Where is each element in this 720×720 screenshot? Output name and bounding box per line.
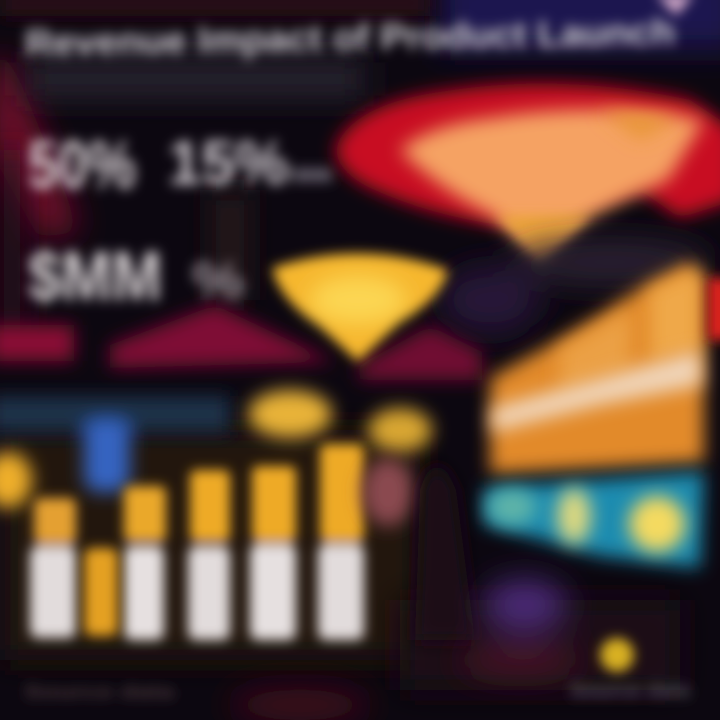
footer text: Source data — [570, 680, 691, 702]
figure: pink glow and silhouette — [362, 458, 475, 640]
footer text — [24, 680, 691, 702]
chart: perspective orange bars — [490, 262, 720, 474]
stat text: first row: 50% — [28, 127, 136, 203]
stat text: second row: % — [192, 252, 244, 310]
column four — [250, 466, 296, 640]
stat text: first row — [28, 127, 332, 203]
band: blue strip — [0, 396, 230, 492]
stat text: first row: 15% — [168, 129, 288, 198]
small orange bar — [84, 548, 118, 636]
icon: top corner mark — [656, 0, 694, 16]
footer text: Source data — [24, 682, 175, 702]
column one — [30, 498, 76, 638]
column five — [318, 444, 364, 640]
title: Revenue Impact of Product Launch — [25, 11, 675, 64]
stat text: second row: $MM — [28, 237, 162, 315]
column three — [188, 470, 230, 640]
icon: yellow dot — [600, 638, 634, 672]
icon: small yellow shapes — [0, 390, 432, 508]
column two — [124, 486, 166, 640]
purple and maroon glows — [230, 579, 580, 720]
band: maroon roof — [0, 305, 482, 380]
dark clouds — [440, 240, 710, 334]
chart: yellow funnel — [272, 253, 448, 362]
panel: teal stat boxes — [484, 472, 704, 568]
chart: large red and orange funnel — [335, 84, 720, 262]
chart: column bars — [30, 444, 364, 640]
